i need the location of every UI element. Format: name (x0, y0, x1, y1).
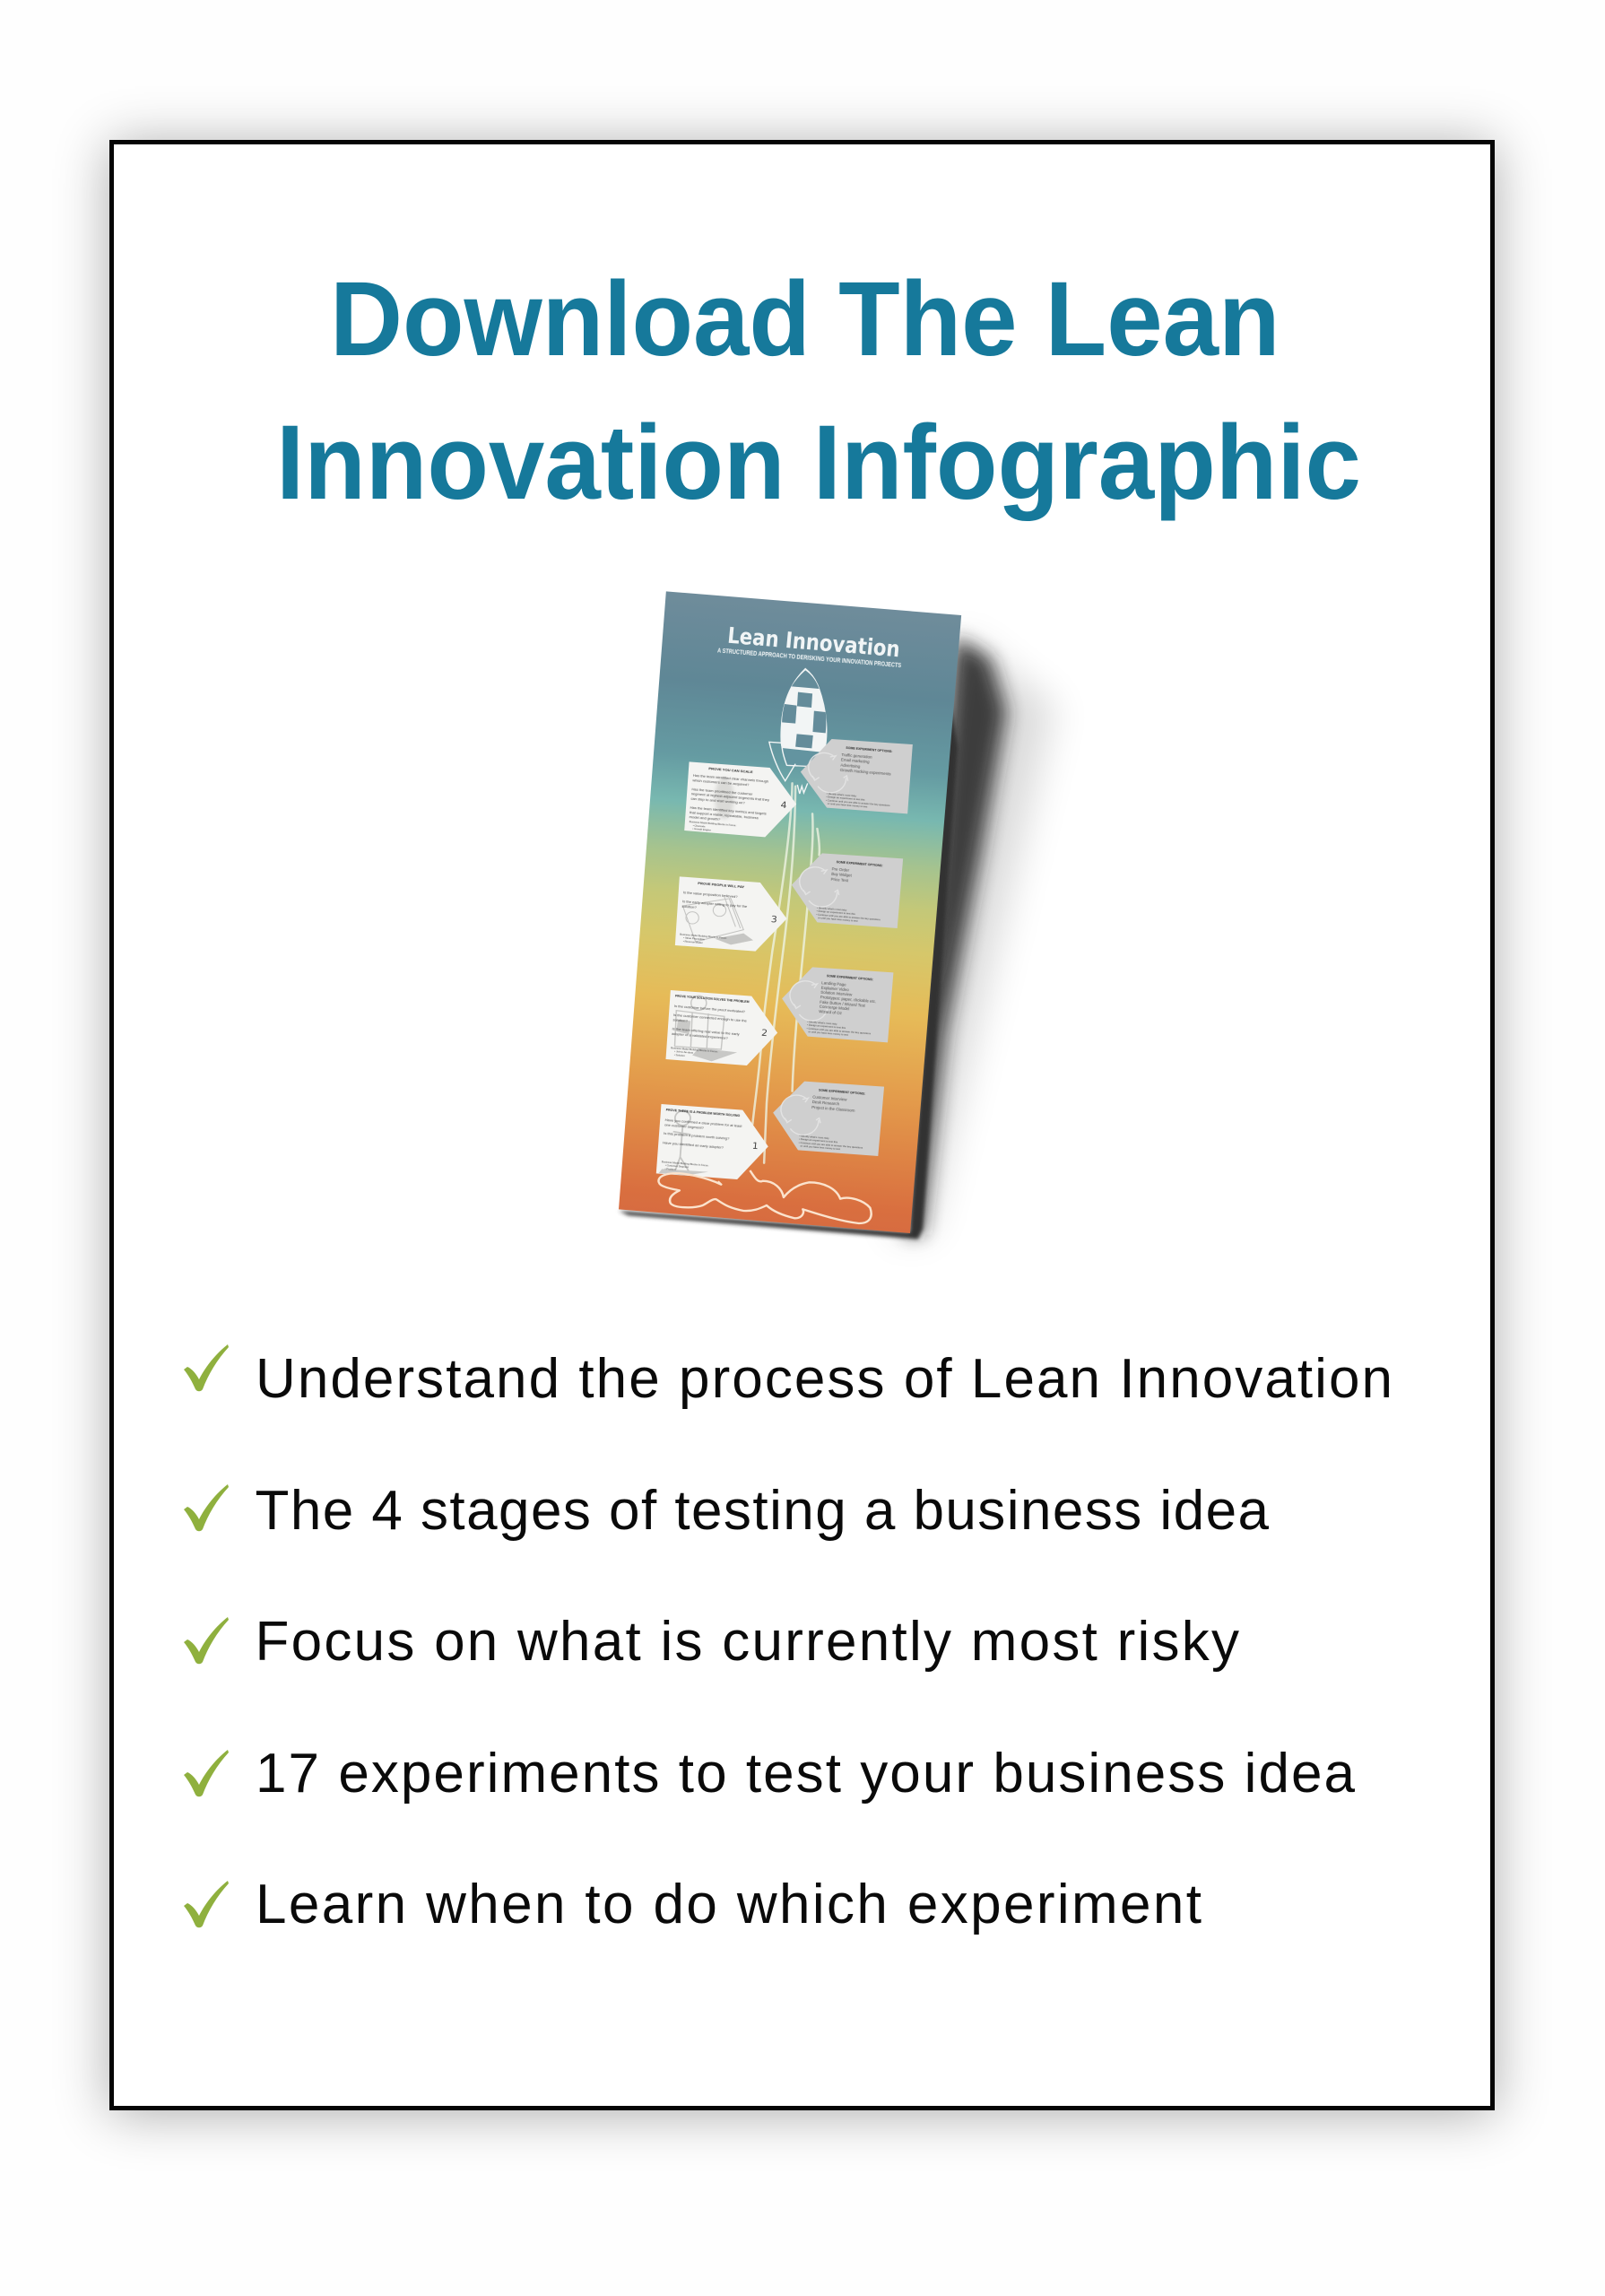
panel: step 2 experiment options: Explainer Video (821, 986, 850, 992)
panel: step 1 prove there is a problem worth solving: • Problem (664, 1167, 677, 1171)
panel: step 4 prove you can scale: which customers can be acquired? (692, 778, 750, 787)
panel: step 1 prove there is a problem worth solving: • Customer Segment (665, 1163, 689, 1169)
panel: step 2 prove your solution solves the problem: Is the customer before the proof motivated? (674, 1004, 746, 1014)
panel: step 1 experiment options: Desk Research (812, 1100, 840, 1107)
panel: step 1 prove there is a problem worth solving: Have you identified an early adopter? (663, 1140, 724, 1150)
icon: green check (184, 1617, 229, 1664)
panel: step 3 prove people will pay (675, 876, 786, 952)
panel: step 4 experiment options: SOME EXPERIMENT OPTIONS: (846, 745, 893, 753)
panel: step 2 prove your solution solves the problem (665, 990, 777, 1065)
poster sheet with gradient (619, 591, 961, 1233)
panel: step 4 experiment options: or until you have less money to test (828, 802, 868, 809)
panel: step 2 experiment options: SOME EXPERIMENT OPTIONS: (827, 973, 873, 981)
panel: step 2 prove your solution solves the problem: Is the team offering real value to the early (672, 1026, 740, 1036)
panel: step 1 prove there is a problem worth solving (656, 1104, 768, 1179)
panel: step 4 experiment options: • Design an experiment to test this (826, 796, 865, 802)
panel: step 4 prove you can scale: that support a viable, repeatable, business (690, 810, 759, 820)
rocket trails (752, 783, 820, 1163)
list item 3: Focus on what is currently most risky (255, 1611, 1239, 1673)
panel: step 3 experiment options: • Continue until you are able to answer the key questions (816, 913, 881, 921)
panel: step 1 experiment options: or until you have less money to test (800, 1144, 840, 1151)
panel: step 2 experiment options: Prototypes: paper, clickable etc. (820, 995, 876, 1004)
checklist (184, 1344, 1392, 1935)
panel: step 1 experiment options: Project in the Classroom (811, 1105, 855, 1113)
panel: step 4 prove you can scale: model and growth? (689, 814, 721, 822)
panel: step 1 prove there is a problem worth solving: one customer segment? (664, 1123, 705, 1130)
panel: step 4 experiment options: • Continue until you are able to answer the key questions (826, 798, 890, 807)
panel: step 4 prove you can scale (684, 761, 796, 837)
panel: step 4 experiment options: Email marketing (841, 758, 870, 764)
panel: step 2 experiment options: Solution Interview (820, 990, 853, 997)
icon: green check (184, 1484, 229, 1531)
panel: step 4 experiment options: Advertising (840, 762, 861, 769)
panel: step 4 prove you can scale: Has the team identified clear channels through (693, 773, 768, 784)
panel: step 4 experiment options: Growth Hacking experiments (840, 768, 891, 776)
panel: step 3 experiment options (792, 853, 903, 928)
panel: step 2 prove your solution solves the problem: Is the customer connected enough to use the (673, 1013, 748, 1023)
panel: step 4 prove you can scale: can step to and start working on? (690, 796, 746, 805)
panel: step 2 prove your solution solves the problem: Business Model Building Blocks In Focus: (671, 1046, 718, 1054)
panel: step 2 experiment options: • Identify what's most risky (807, 1020, 837, 1026)
panel: step 4 prove you can scale: Has the team identified key metrics and targets (690, 805, 767, 816)
panel: step 1 experiment options: Customer Interview (812, 1095, 848, 1102)
panel: step 2 experiment options: Fake Button / Wizard Test (820, 1000, 866, 1008)
panel: step 2 prove your solution solves the problem: • Job-to-be-done (674, 1049, 694, 1055)
title: Download The Lean (330, 260, 1280, 378)
icon: green check (184, 1750, 229, 1796)
panel: step 1 experiment options: • Design an experiment to test this (799, 1137, 838, 1144)
panel: step 3 experiment options: SOME EXPERIMENT OPTIONS: (837, 859, 883, 867)
panel: step 3 prove people will pay: PROVE PEOPLE WILL PAY (698, 881, 745, 889)
panel: step 3 experiment options: Price Test (830, 877, 849, 883)
launch smoke cloud (658, 1170, 872, 1223)
panel: step 2 experiment options: Landing Page (821, 980, 846, 987)
poster title: Lean Innovation (726, 623, 901, 663)
panel: step 3 experiment options: Buy Widget (831, 872, 853, 878)
panel: step 4 prove you can scale: 4 (780, 800, 787, 811)
panel: download card frame (109, 140, 1495, 2110)
panel: step 2 experiment options: • Continue until you are able to answer the key questions (807, 1027, 872, 1035)
list item 4: 17 experiments to test your business idea (256, 1743, 1356, 1805)
panel: step 4 prove you can scale: • Growth Engine (692, 827, 712, 832)
poster title: A STRUCTURED APPROACH TO DERISKING YOUR INNOVATION PROJECTS (717, 647, 902, 669)
panel: step 3 experiment options: Pre Order (831, 866, 850, 873)
list item 2: The 4 stages of testing a business idea (255, 1480, 1270, 1542)
panel: step 1 experiment options (773, 1082, 884, 1156)
panel: step 2 experiment options (782, 967, 893, 1042)
panel: step 2 experiment options: • Design an experiment to test this (807, 1023, 846, 1030)
rocket (769, 668, 827, 794)
panel: step 3 prove people will pay: Is the value proposition believed? (683, 891, 739, 899)
panel: step 3 experiment options: • Design an experiment to test this (817, 909, 856, 916)
panel: step 3 prove people will pay: solution? (681, 904, 698, 909)
panel: step 2 prove your solution solves the problem: adopter of a validated experience? (672, 1031, 729, 1040)
infographic poster mockup (619, 591, 1054, 1239)
panel: step 3 prove people will pay: • Value Proposition (683, 936, 706, 942)
panel: step 2 prove your solution solves the problem: solution? (672, 1017, 689, 1023)
panel: step 2 experiment options: Wizard of Oz (819, 1009, 842, 1015)
panel: step 1 experiment options: SOME EXPERIMENT OPTIONS: (819, 1087, 865, 1096)
poster drop shadow (619, 631, 1054, 1239)
panel: step 1 prove there is a problem worth solving: Business Model Building Blocks In Focus: (662, 1160, 709, 1168)
list item 5: Learn when to do which experiment (256, 1874, 1202, 1935)
panel: step 4 prove you can scale: Has the team prioritised the customer (691, 787, 753, 796)
panel: step 2 experiment options: Concierge Model (820, 1004, 850, 1011)
icon: green check (184, 1344, 229, 1391)
panel: step 1 experiment options: • Identify what's most risky (799, 1135, 829, 1140)
panel: step 4 prove you can scale: • Channels (692, 823, 706, 828)
panel: step 3 prove people will pay: Is the early adopter willing to pay for the (682, 900, 748, 909)
panel: step 4 experiment options (801, 739, 913, 813)
panel: step 2 prove your solution solves the problem: 2 (761, 1028, 768, 1039)
panel: step 2 experiment options: or until you have less money to test (808, 1030, 848, 1037)
panel: step 4 experiment options: Traffic generation (841, 752, 872, 760)
panel: step 4 experiment options: • Identify what's most risky (827, 792, 857, 797)
panel: step 1 prove there is a problem worth solving: PROVE THERE IS A PROBLEM WORTH SOLVING (665, 1108, 740, 1118)
panel: step 1 prove there is a problem worth solving: Is this problem a problem worth solving? (664, 1131, 730, 1141)
panel: step 3 prove people will pay: • Revenue Model (683, 939, 703, 944)
list item 1: Understand the process of Lean Innovation (256, 1348, 1392, 1410)
panel: step 4 prove you can scale: PROVE YOU CAN SCALE (708, 766, 753, 774)
panel: step 1 prove there is a problem worth solving: 1 (751, 1141, 759, 1152)
panel: step 3 experiment options: • Identify what's most risky (817, 906, 847, 912)
panel: step 3 experiment options: or until you have less money to test (818, 916, 858, 923)
title: Innovation Infographic (276, 404, 1361, 522)
icon: green check (184, 1881, 229, 1927)
panel: step 4 prove you can scale: segment at highest-adjacent segments that they (691, 791, 769, 802)
panel: step 1 prove there is a problem worth solving: Have you confirmed a clear problem for at least (664, 1118, 743, 1128)
panel: step 2 prove your solution solves the problem: • Solution (674, 1053, 686, 1057)
panel: step 2 prove your solution solves the problem: PROVE YOUR SOLUTION SOLVES THE PROBLEM (675, 994, 750, 1004)
panel: step 4 prove you can scale: Business Model Building Blocks In Focus: (690, 820, 737, 828)
title (276, 260, 1361, 522)
panel: step 3 prove people will pay: 3 (770, 914, 777, 925)
panel: step 3 prove people will pay: Business Model Building Blocks In Focus: (680, 933, 727, 940)
panel: step 1 experiment options: • Continue until you are able to answer the key questions (799, 1141, 863, 1150)
